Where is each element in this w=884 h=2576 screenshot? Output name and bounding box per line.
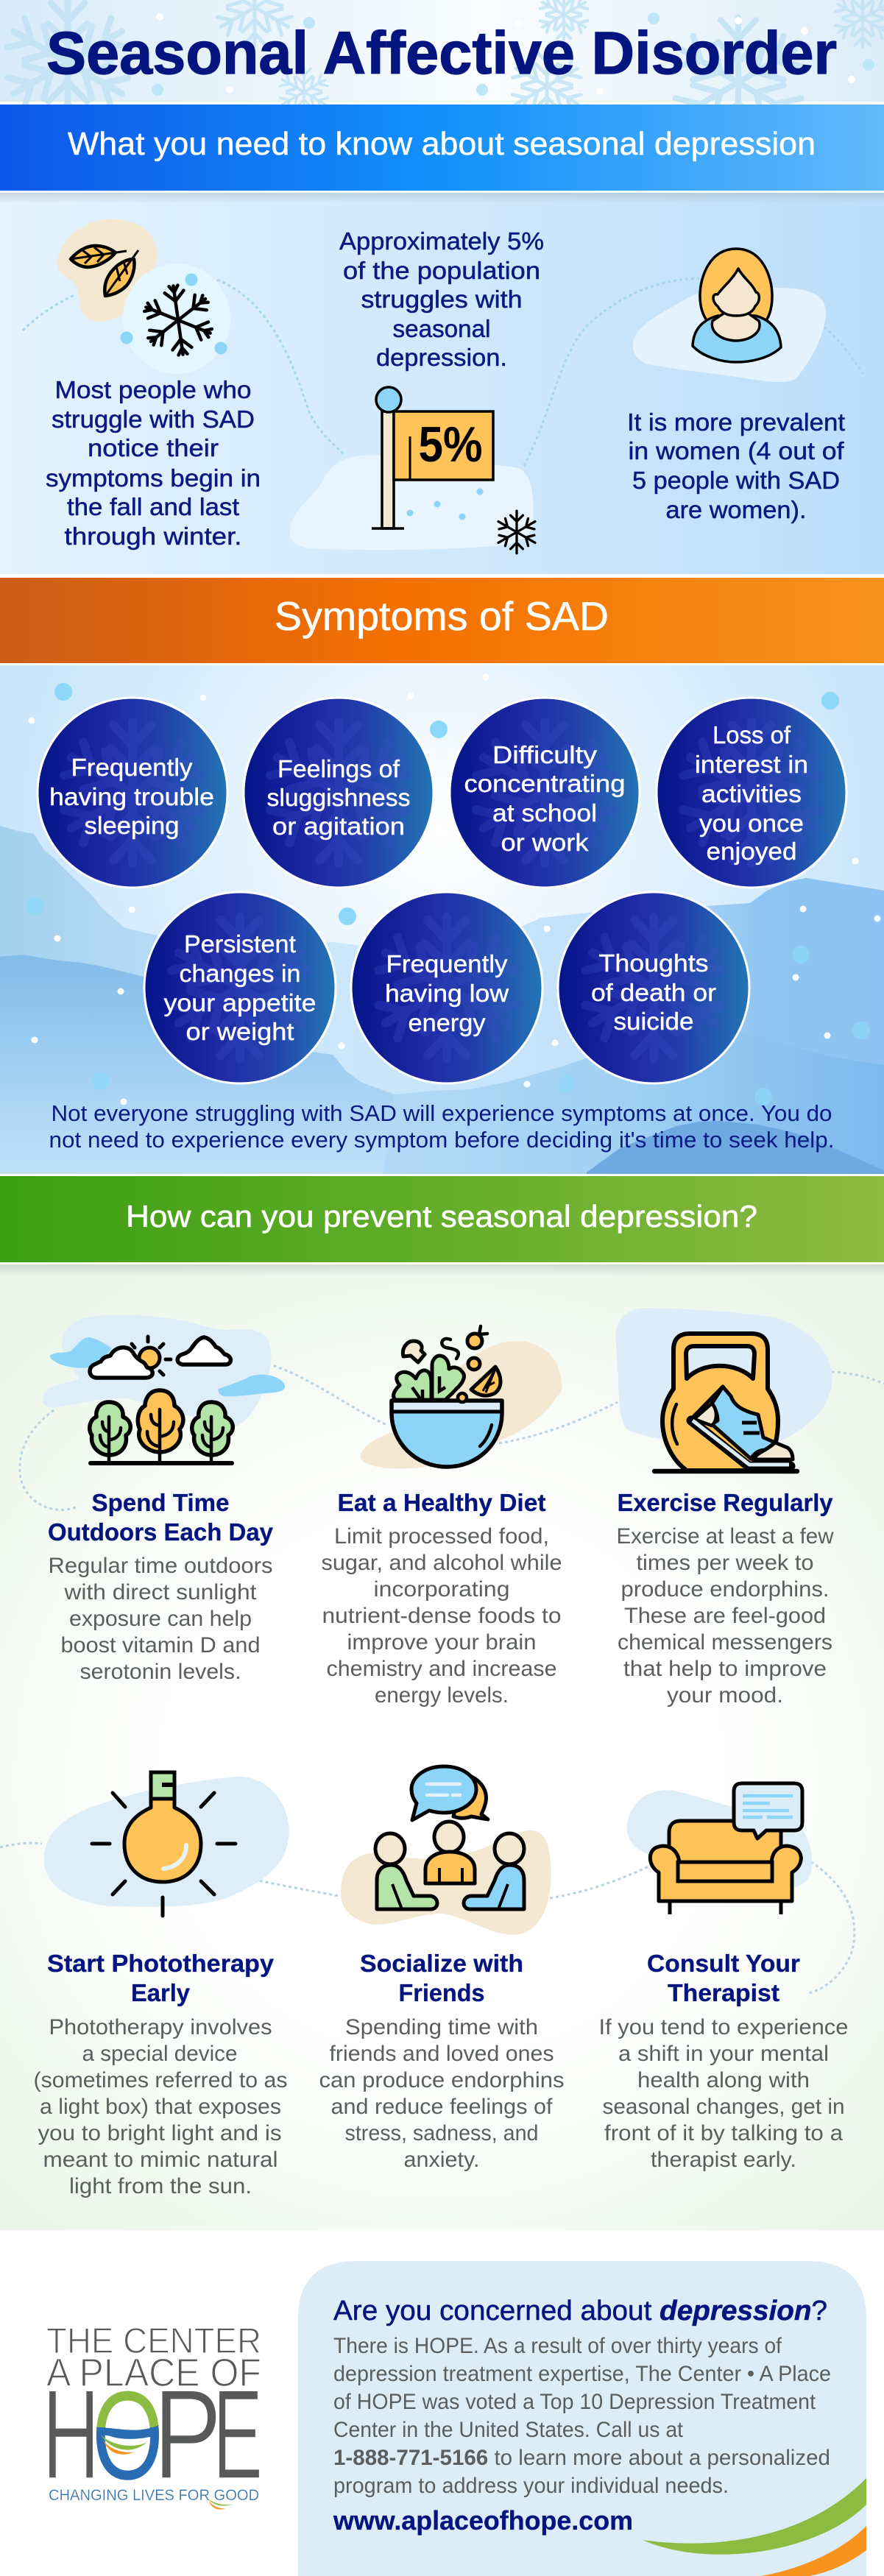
text: fall and winter: struggle with SAD — [52, 406, 255, 433]
text: more prevalent in women: in women (4 out of — [629, 437, 844, 464]
text: consult your therapist: Consult Your — [647, 1950, 800, 1977]
text: more prevalent in women: are women). — [665, 496, 807, 523]
icon: outdoors trees and clouds — [43, 1314, 285, 1463]
text: start phototherapy early: Early — [131, 1979, 191, 2006]
text: eat a healthy diet: sugar, and alcohol while — [321, 1551, 562, 1575]
symptom circle: difficulty concentrating — [450, 698, 640, 888]
icon: kettlebell and shoe — [616, 1308, 832, 1471]
symptom circle: sluggishness — [244, 698, 434, 888]
text: eat a healthy diet — [321, 1489, 562, 1708]
text: socialize with friends: stress, sadness, and — [344, 2121, 539, 2145]
symptom circle: trouble sleeping — [38, 698, 227, 888]
symptom circle: loss of interest: enjoyed — [707, 838, 796, 865]
text: five percent: struggles with — [361, 286, 523, 313]
text: consult your therapist — [599, 1950, 848, 2172]
text: fall and winter: symptoms begin in — [46, 464, 261, 492]
text: spend time outdoors: Outdoors Each Day — [48, 1518, 274, 1546]
text: socialize with friends: friends and loved ones — [330, 2042, 554, 2066]
text: start phototherapy early: a special device — [82, 2042, 237, 2066]
logo: The Center A Place of Hope: THE CENTER — [46, 2321, 261, 2361]
text: consult your therapist: Therapist — [668, 1979, 779, 2006]
section band: symptoms of SAD — [0, 578, 884, 663]
text: exercise regularly: produce endorphins. — [621, 1577, 829, 1602]
text: spend time outdoors: Regular time outdoors — [49, 1554, 272, 1578]
text: spend time outdoors — [48, 1489, 274, 1684]
text: eat a healthy diet: Limit processed food, — [334, 1524, 549, 1549]
symptom circle: low energy: energy — [408, 1009, 486, 1036]
text: start phototherapy early: a light box) that exposes — [40, 2095, 281, 2119]
icon: friends talking — [341, 1766, 551, 1935]
symptom circle: low energy: Frequently — [386, 950, 508, 977]
text: exercise regularly: Exercise at least a few — [617, 1524, 834, 1549]
icon: five percent flag — [290, 387, 538, 553]
text: exercise regularly: your mood. — [667, 1683, 783, 1708]
text: exercise regularly: times per week to — [636, 1551, 814, 1575]
logo: The Center A Place of Hope: CHANGING LIVES FOR GOOD — [49, 2487, 259, 2504]
text: symptoms note: not need to experience every symptom before deciding it's time to seek help. — [49, 1127, 835, 1153]
text: socialize with friends: can produce endorphins — [319, 2068, 564, 2092]
text: start phototherapy early: you to bright light and is — [38, 2121, 281, 2145]
panel: contact callout: Are you concerned about depression? — [333, 2296, 827, 2326]
text: more prevalent in women: It is more prevalent — [627, 408, 845, 436]
text: start phototherapy early: (sometimes referred to as — [34, 2068, 287, 2092]
symptom circle: loss of interest: activities — [701, 780, 802, 807]
symptom circle: appetite changes: your appetite — [163, 989, 317, 1016]
text: eat a healthy diet: incorporating — [374, 1577, 509, 1602]
text: symptoms note: Not everyone struggling with SAD will experience symptoms at once. You do — [52, 1100, 832, 1126]
icon: woman — [633, 249, 826, 382]
text: start phototherapy early: light from the sun. — [69, 2174, 252, 2198]
symptom circle: difficulty concentrating: concentrating — [464, 770, 626, 797]
text: five percent: Approximately 5% — [339, 227, 544, 255]
text: consult your therapist: a shift in your mental — [618, 2042, 829, 2066]
panel: contact callout: There is HOPE. As a result of over thirty years of — [333, 2334, 782, 2358]
logo: The Center A Place of Hope: E — [213, 2363, 263, 2505]
text: fall and winter: through winter. — [65, 523, 241, 550]
panel: contact callout: program to address your individual needs. — [333, 2474, 729, 2498]
panel: symptoms background with mountains — [0, 665, 884, 1174]
section band: prevention: How can you prevent seasonal depression? — [126, 1199, 757, 1234]
text: consult your therapist: front of it by talking to a — [604, 2121, 843, 2145]
text: socialize with friends: Spending time with — [345, 2015, 538, 2039]
text: exercise regularly: Exercise Regularly — [617, 1489, 833, 1516]
text: eat a healthy diet: improve your brain — [347, 1630, 536, 1655]
section band: prevention — [0, 1176, 884, 1262]
section band: symptoms of SAD: Symptoms of SAD — [275, 593, 609, 639]
panel: what you need to know — [0, 193, 884, 574]
symptom circle: sluggishness: Feelings of — [277, 755, 400, 782]
text: spend time outdoors: serotonin levels. — [79, 1660, 241, 1684]
text: five percent: seasonal — [393, 315, 490, 342]
text: five percent: of the population — [343, 257, 540, 284]
text: socialize with friends: Socialize with — [360, 1950, 523, 1977]
text: consult your therapist: therapist early. — [651, 2148, 796, 2172]
text: eat a healthy diet: nutrient-dense foods to — [322, 1604, 561, 1628]
panel: contact callout: 1-888-771-5166 to learn more about a personalized — [333, 2446, 830, 2470]
symptom circle: appetite changes: Persistent — [184, 930, 296, 958]
text: socialize with friends: Friends — [399, 1979, 484, 2006]
text: fall and winter — [46, 376, 261, 550]
text: socialize with friends — [319, 1950, 564, 2172]
symptom circle: loss of interest: Loss of — [712, 721, 791, 749]
icon: salad bowl — [361, 1326, 562, 1468]
text: socialize with friends: and reduce feelings of — [331, 2095, 553, 2119]
text: more prevalent in women — [627, 408, 845, 523]
icon: five percent flag: 5% — [418, 417, 483, 473]
text: five percent: depression. — [376, 344, 507, 371]
symptom circle: trouble sleeping: sleeping — [84, 812, 180, 839]
symptom circle: loss of interest — [657, 698, 846, 888]
text: exercise regularly: chemical messengers — [618, 1630, 832, 1655]
text: fall and winter: notice their — [88, 434, 219, 461]
icon: autumn leaves and snowflake — [57, 219, 230, 374]
symptom circle: thoughts of death — [558, 892, 749, 1083]
text: consult your therapist: If you tend to experience — [599, 2015, 848, 2039]
icon: light bulb — [44, 1772, 289, 1916]
symptom circle: difficulty concentrating: or work — [501, 829, 589, 856]
text: spend time outdoors: with direct sunlight — [63, 1580, 257, 1604]
symptom circle: appetite changes — [144, 892, 336, 1083]
text: fall and winter: the fall and last — [67, 493, 239, 520]
swoosh: green and orange — [643, 2478, 866, 2576]
logo: The Center A Place of Hope: O — [92, 2366, 163, 2506]
text: eat a healthy diet: energy levels. — [375, 1683, 509, 1708]
text: socialize with friends: anxiety. — [403, 2148, 480, 2172]
text: spend time outdoors: Spend Time — [91, 1489, 230, 1516]
symptom circle: appetite changes: changes in — [180, 960, 300, 987]
logo: The Center A Place of Hope: O — [92, 2366, 163, 2506]
text: exercise regularly — [617, 1489, 834, 1708]
text: start phototherapy early: Start Phototherapy — [47, 1950, 275, 1977]
icon: therapist couch — [627, 1783, 812, 1914]
symptom circle: trouble sleeping: having trouble — [49, 783, 214, 810]
symptom circle: thoughts of death: Thoughts — [599, 949, 708, 977]
text: start phototherapy early: Phototherapy involves — [49, 2015, 272, 2039]
text: start phototherapy early — [34, 1950, 287, 2198]
panel: contact callout — [298, 2261, 866, 2576]
panel: contact callout: depression treatment expertise, The Center • A Place — [333, 2362, 831, 2386]
symptom circle: sluggishness: sluggishness — [266, 784, 411, 811]
text: symptoms note — [49, 1100, 835, 1153]
section band: what you need to know — [0, 105, 884, 191]
text: eat a healthy diet: Eat a Healthy Diet — [337, 1489, 546, 1516]
panel: contact callout: Center in the United States. Call us at — [333, 2418, 684, 2442]
logo: The Center A Place of Hope: P — [153, 2363, 222, 2505]
section band: what you need to know: What you need to know about seasonal depression — [68, 126, 816, 162]
text: exercise regularly: These are feel-good — [624, 1604, 826, 1628]
title: Seasonal Affective Disorder — [46, 20, 837, 87]
symptom circle: low energy: having low — [385, 980, 509, 1007]
logo: The Center A Place of Hope — [43, 2321, 263, 2510]
text: spend time outdoors: boost vitamin D and — [60, 1633, 261, 1657]
logo: The Center A Place of Hope: A PLACE OF — [46, 2351, 261, 2395]
text: more prevalent in women: 5 people with SAD — [632, 467, 840, 494]
symptom circle: difficulty concentrating: at school — [492, 799, 597, 827]
text: consult your therapist: health along with — [637, 2068, 810, 2092]
symptom circle: loss of interest: interest in — [695, 751, 808, 778]
text: five percent — [339, 227, 544, 371]
text: fall and winter: Most people who — [54, 376, 252, 403]
symptom circle: difficulty concentrating: Difficulty — [492, 741, 598, 768]
symptom circle: thoughts of death: suicide — [614, 1008, 693, 1035]
text: start phototherapy early: meant to mimic natural — [43, 2148, 278, 2172]
symptom circle: low energy — [351, 892, 542, 1083]
text: consult your therapist: seasonal changes, get in — [602, 2095, 845, 2119]
panel: prevention background — [0, 1264, 884, 2230]
text: spend time outdoors: exposure can help — [69, 1607, 252, 1631]
header background with snowflakes — [0, 0, 884, 147]
panel: contact callout: of HOPE was voted a Top 10 Depression Treatment — [333, 2390, 816, 2414]
symptom circle: sluggishness: or agitation — [272, 813, 405, 840]
symptom circle: trouble sleeping: Frequently — [71, 754, 193, 781]
panel: contact callout: www.aplaceofhope.com — [333, 2505, 633, 2536]
text: eat a healthy diet: chemistry and increase — [327, 1657, 556, 1681]
symptom circle: loss of interest: you once — [699, 810, 804, 837]
symptom circle: appetite changes: or weight — [185, 1018, 294, 1045]
text: exercise regularly: that help to improve — [623, 1657, 827, 1681]
symptom circle: thoughts of death: of death or — [591, 979, 716, 1006]
logo: The Center A Place of Hope: H — [43, 2363, 100, 2505]
